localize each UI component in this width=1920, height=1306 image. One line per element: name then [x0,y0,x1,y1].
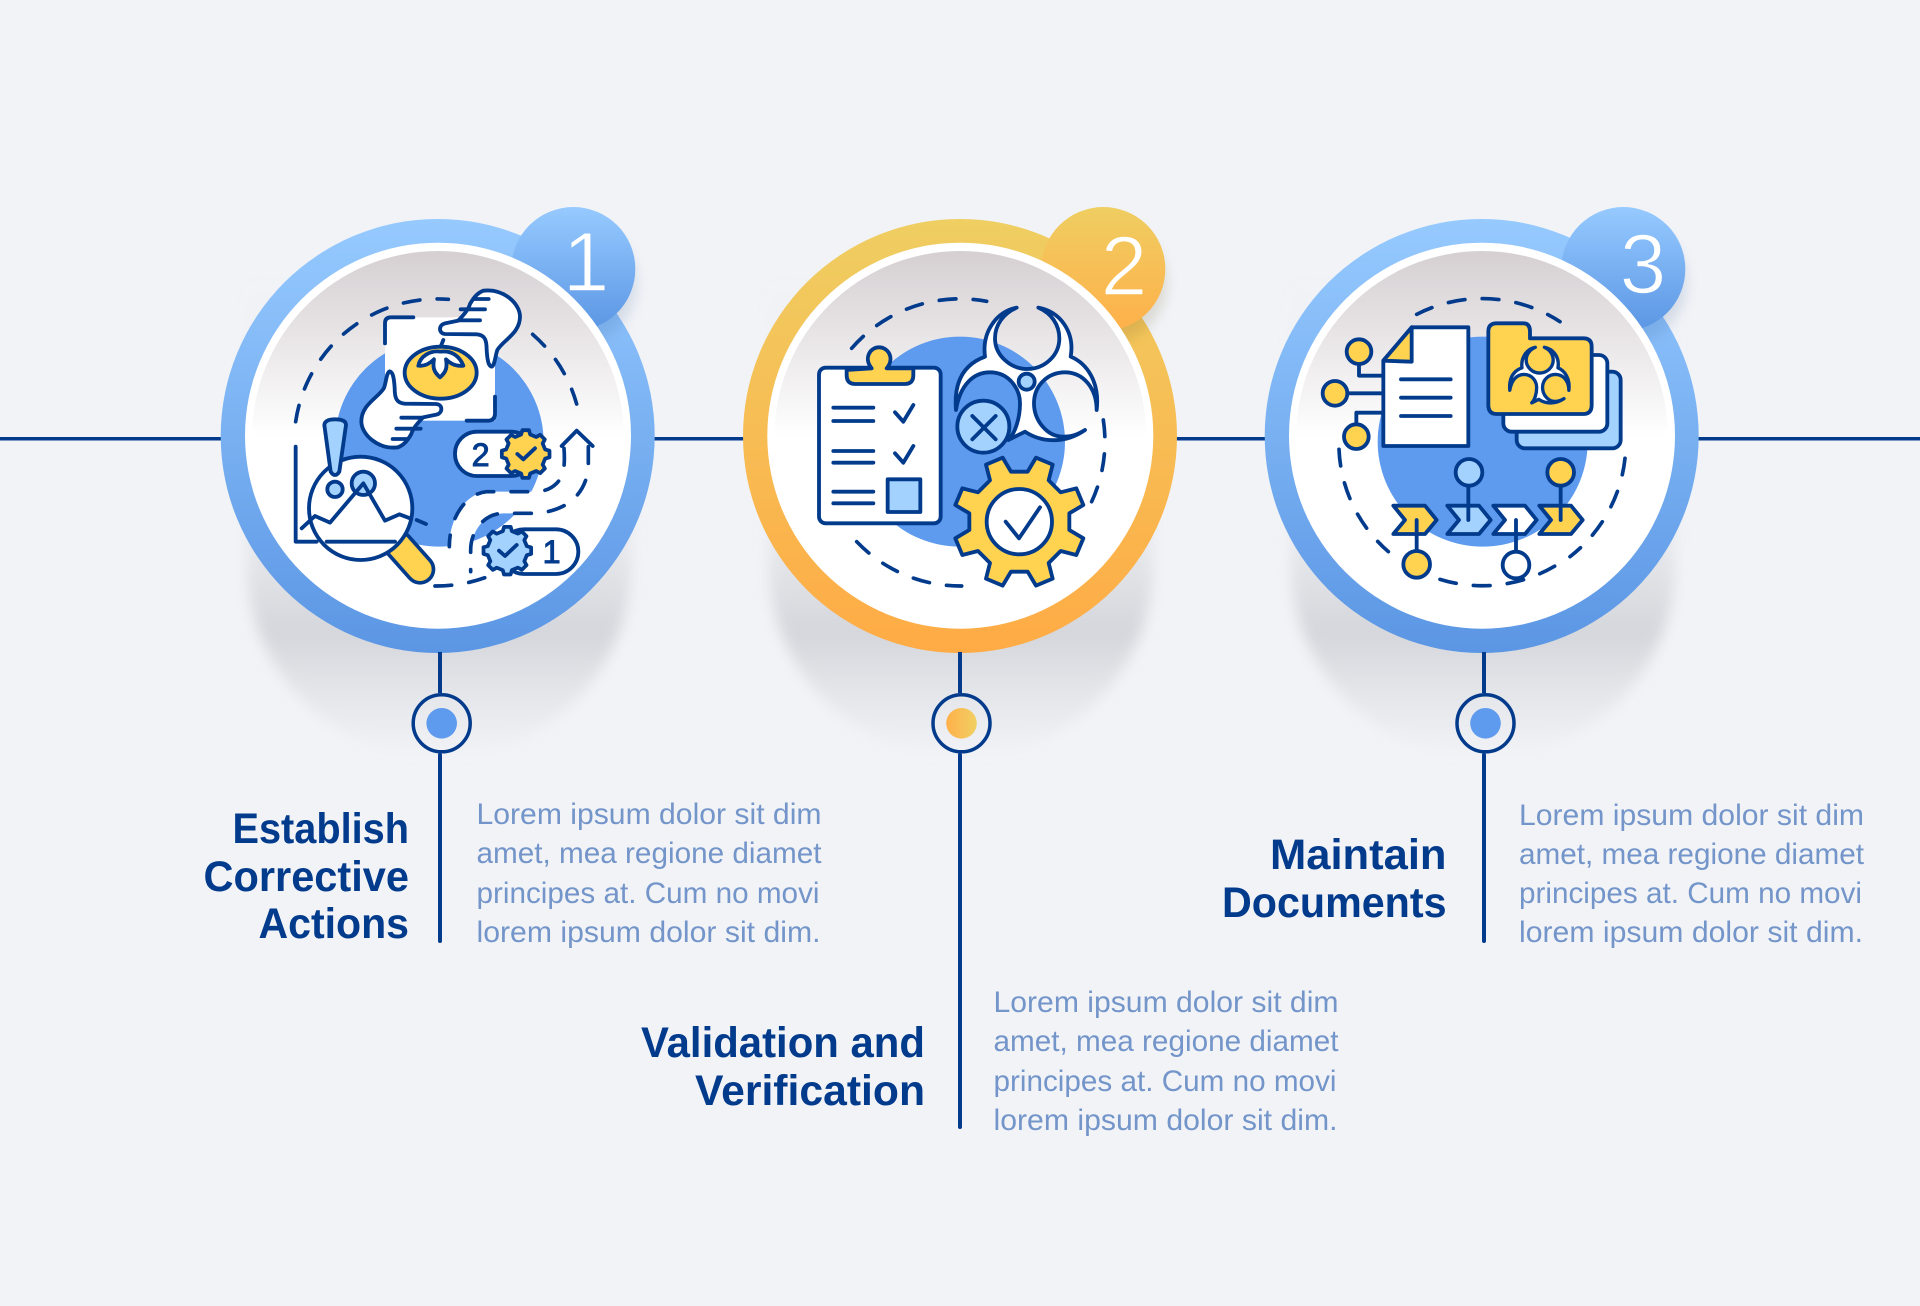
heading: step 2: Validation and [641,1019,925,1067]
heading: step 2 [641,1019,925,1115]
number badge: step 3 [1561,207,1687,343]
timeline chevrons [1393,459,1583,578]
step pill 1: 1 [543,534,561,570]
magnifier [302,457,426,569]
text block: step 2: lorem ipsum dolor sit dim. [994,1104,1338,1137]
folders [1488,323,1621,448]
outer ring: step 2 [743,219,1177,653]
text block: step 2 [994,986,1339,1137]
step pill 2: 2 [472,437,490,473]
heading: step 3: Documents [1222,879,1446,927]
outer ring: step 1 [221,219,655,653]
text block: step 3: Lorem ipsum dolor sit dim [1519,799,1864,832]
road [449,431,593,572]
step pill 2 [455,424,556,484]
gear with check [955,458,1083,586]
outer ring: step 3 [1265,219,1699,653]
text block: step 2: amet, mea regione diamet [994,1025,1339,1058]
text block: step 3: amet, mea regione diamet [1519,838,1865,871]
text block: step 3: principes at. Cum no movi [1519,877,1862,910]
hand: bottom left [361,371,441,448]
document [1383,327,1468,446]
number badge: step 3: 3 [1620,217,1666,311]
hand: top right [440,290,520,367]
text block: step 2: Lorem ipsum dolor sit dim [994,986,1338,1019]
panel: step 2 circle [743,207,1177,757]
timeline horizontal line [0,437,1920,440]
panel: step 1 circle [221,207,655,757]
heading: step 1 [204,805,409,948]
reject circle [957,401,1009,453]
shadow: step 3 [1291,280,1675,757]
panel: step 3 circle [1265,207,1699,757]
shadow: step 2 [769,280,1153,757]
icon: validation and verification [819,299,1105,586]
clipboard [819,347,941,523]
connector: step 3 [1457,652,1514,943]
chart axes [296,447,317,542]
heading: step 1: Actions [258,900,409,948]
biohazard symbol [956,308,1097,440]
exclamation mark [324,419,346,475]
text block: step 1: amet, mea regione diamet [476,837,822,870]
connector: step 2 [933,652,990,1129]
inner disc: step 1 [245,243,631,629]
heading: step 1: Establish [232,805,409,853]
number badge: step 1: 1 [563,215,609,309]
step pill 1 [477,520,578,581]
text block: step 1 [476,798,822,949]
tomato [405,340,477,399]
photo frame [385,317,495,421]
heading: step 3 [1222,831,1446,927]
circuit nodes [1323,339,1382,449]
number badge: step 2: 2 [1101,219,1147,313]
inner disc: step 3 [1289,243,1675,629]
text block: step 1: Lorem ipsum dolor sit dim [476,798,822,831]
heading: step 1: Corrective [204,853,409,901]
number badge: step 2 [1041,207,1167,343]
text block: step 1: principes at. Cum no movi [476,877,820,910]
text block: step 3 [1519,799,1865,949]
text block: step 3: lorem ipsum dolor sit dim. [1519,916,1863,949]
heading: step 3: Maintain [1270,831,1446,879]
heading: step 2: Verification [695,1067,925,1115]
inner disc: step 2 [767,243,1153,629]
connector: step 1 [413,652,470,943]
icon: corrective actions [296,290,593,586]
shadow: step 1 [247,280,631,757]
text block: step 1: lorem ipsum dolor sit dim. [476,916,820,949]
text block: step 2: principes at. Cum no movi [994,1065,1336,1098]
number badge: step 1 [511,207,637,343]
icon: maintain documents [1323,299,1625,586]
